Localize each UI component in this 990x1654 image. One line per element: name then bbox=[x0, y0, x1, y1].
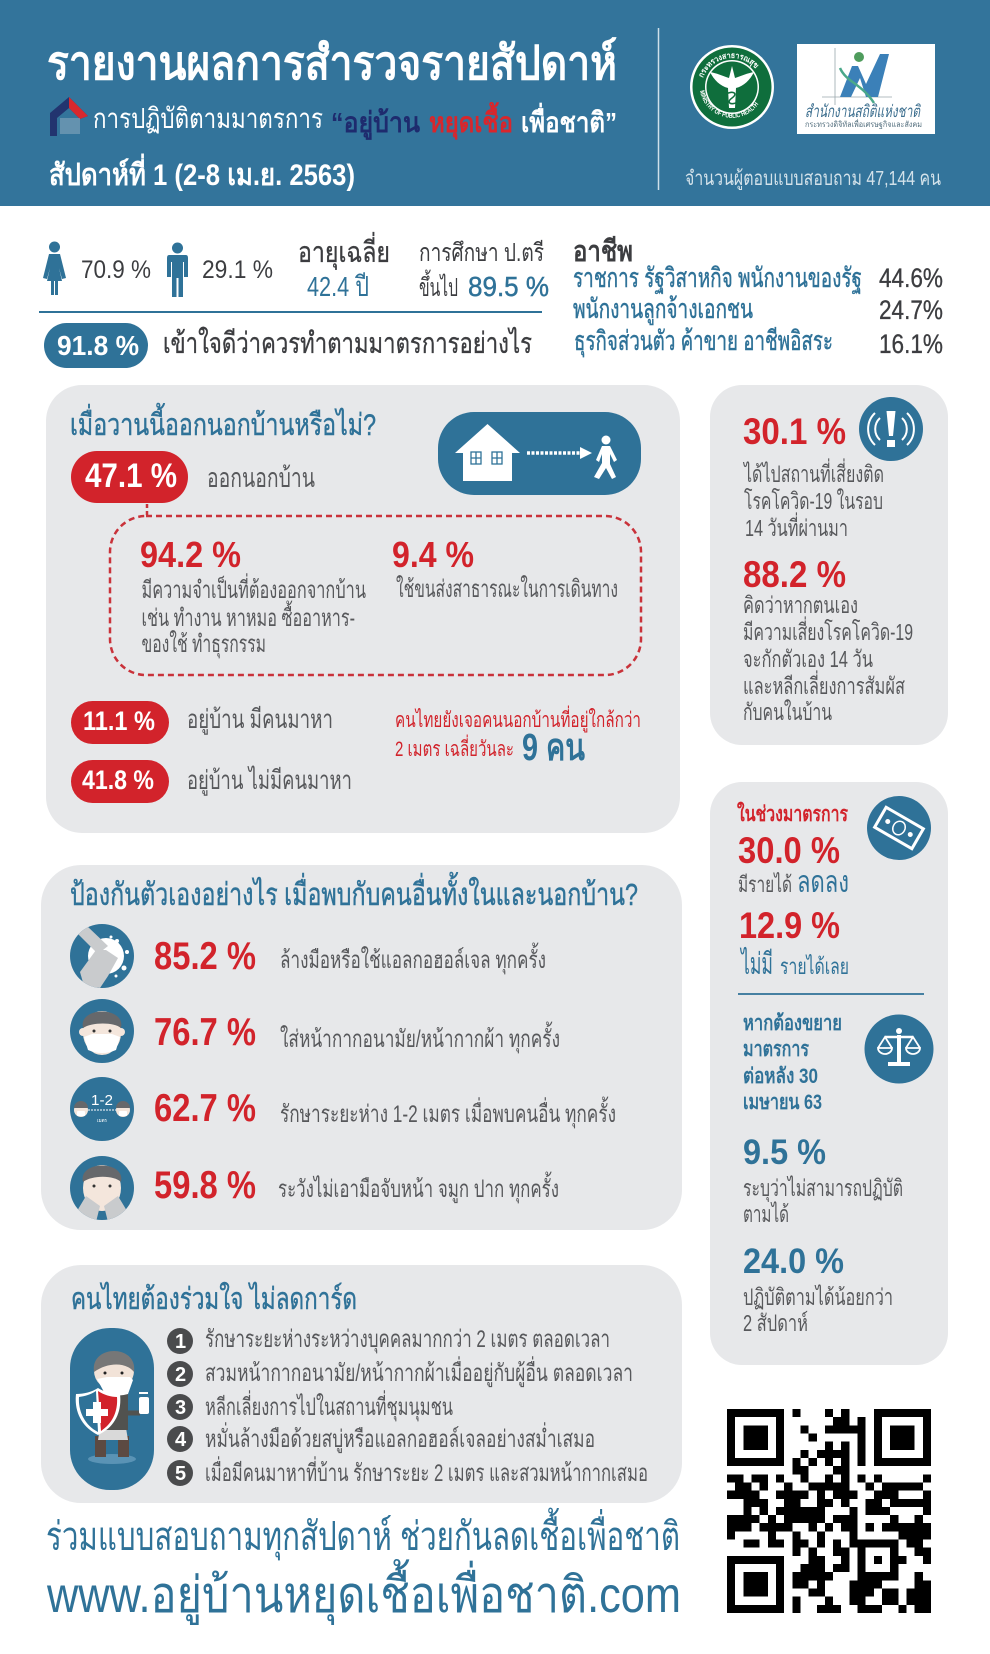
rule 5 bbox=[167, 1456, 648, 1487]
panel: demographics bbox=[39, 232, 943, 368]
close contact note: 9 คน bbox=[522, 727, 585, 769]
row: hand washing bbox=[154, 935, 546, 978]
dashed callout: 9.4 % bbox=[392, 534, 474, 575]
row: hand washing: ล้างมือหรือใช้แอลกอฮอล์เจล ทุกครั้ง bbox=[280, 942, 546, 975]
income stats: 30.0 % bbox=[738, 830, 840, 871]
extension heading: มาตรการ bbox=[743, 1038, 810, 1061]
occupation: ธุรกิจส่วนตัว ค้าขาย อาชีพอิสระ bbox=[574, 326, 833, 358]
row: hands off face: 59.8 % bbox=[154, 1164, 256, 1207]
extension heading bbox=[743, 1011, 842, 1114]
extension stat one bbox=[743, 1133, 903, 1227]
rule 3 bbox=[167, 1390, 453, 1422]
income stats bbox=[737, 801, 849, 981]
footer call to action: ร่วมแบบสอบถามทุกสัปดาห์ ช่วยกันลดเชื้อเพื่อชาติ bbox=[46, 1507, 680, 1561]
extension heading: เมษายน 63 bbox=[743, 1091, 822, 1114]
dashed callout: 94.2 % bbox=[140, 534, 241, 575]
dashed callout: ของใช้ ทำธุรกรรม bbox=[142, 630, 266, 659]
rule 1: รักษาระยะห่างระหว่างบุคคลมากกว่า 2 เมตร ตลอดเวลา bbox=[205, 1326, 610, 1354]
income stats: ไม่มี bbox=[740, 946, 773, 981]
logo: ministry of public health: กระทรวงสาธารณสุข bbox=[699, 53, 759, 78]
rule 4 bbox=[167, 1422, 595, 1454]
panel: income and extension bbox=[710, 782, 948, 1365]
dashed callout: ใช้ขนส่งสาธารณะในการเดินทาง bbox=[396, 575, 618, 603]
label: at home no visitors: อยู่บ้าน ไม่มีคนมาหา bbox=[187, 765, 352, 796]
close contact note: คนไทยยังเจอคนนอกบ้านที่อยู่ใกล้กว่า bbox=[395, 705, 641, 733]
rule 3: 3 bbox=[175, 1397, 186, 1419]
occupation: 44.6% bbox=[879, 263, 943, 293]
extension heading: หากต้องขยาย bbox=[743, 1011, 842, 1035]
income stats: ในช่วงมาตรการ bbox=[737, 801, 849, 826]
row: distance: 62.7 % bbox=[154, 1087, 256, 1130]
row: face mask bbox=[154, 1011, 560, 1054]
logo: national statistical office: กระทรวงดิจิทัลเพื่อเศรษฐกิจและสังคม bbox=[805, 118, 922, 129]
row: hand washing: 85.2 % bbox=[154, 935, 256, 978]
pill: went out: 47.1 % bbox=[85, 457, 177, 495]
subtitle: การปฏิบัติตามมาตรการ bbox=[93, 103, 323, 134]
dashed callout: เช่น ทำงาน หาหมอ ซื้ออาหาร- bbox=[142, 600, 355, 632]
income stats: มีรายได้ bbox=[738, 872, 792, 897]
rule 2 bbox=[167, 1356, 633, 1388]
logo: national statistical office bbox=[797, 44, 935, 134]
average age bbox=[298, 232, 390, 302]
pill: went out bbox=[71, 451, 188, 503]
income stats: ลดลง bbox=[797, 866, 849, 899]
row: face mask: ใส่หน้ากากอนามัย/หน้ากากผ้า ทุกครั้ง bbox=[280, 1021, 560, 1054]
occupation: 16.1% bbox=[879, 329, 943, 359]
understanding pill: 91.8 % bbox=[57, 330, 139, 361]
panel: went out yesterday bbox=[46, 385, 680, 833]
risk stat two bbox=[743, 554, 913, 725]
subtitle: หยุดเชื้อ bbox=[429, 101, 513, 140]
occupation: อาชีพ bbox=[573, 236, 633, 268]
education bbox=[419, 239, 549, 302]
subtitle bbox=[93, 101, 617, 140]
rule 3: หลีกเลี่ยงการไปในสถานที่ชุมนุมชน bbox=[205, 1390, 453, 1422]
rule 2: 2 bbox=[175, 1364, 186, 1386]
row: hands off face: ระวังไม่เอามือจับหน้า จมูก ปาก ทุกครั้ง bbox=[278, 1171, 559, 1204]
education: การศึกษา ป.ตรี bbox=[419, 239, 544, 267]
risk stat one: 14 วันที่ผ่านมา bbox=[745, 512, 848, 541]
footer url: www.อยู่บ้านหยุดเชื้อเพื่อชาติ.com bbox=[46, 1559, 681, 1625]
average age: 42.4 ปี bbox=[307, 271, 369, 302]
icon: alert bbox=[859, 397, 923, 461]
dashed callout bbox=[110, 516, 641, 675]
risk stat one: โรคโควิด-19 ในรอบ bbox=[744, 488, 883, 514]
icon: hand washing bbox=[70, 924, 134, 988]
icon: leaving house bbox=[438, 412, 641, 495]
icon: male bbox=[167, 242, 188, 297]
heading: เมื่อวานนี้ออกนอกบ้านหรือไม่? bbox=[70, 403, 376, 442]
extension stat one: ตามได้ bbox=[743, 1201, 789, 1227]
risk stat one bbox=[743, 411, 884, 541]
extension stat two bbox=[743, 1242, 893, 1336]
icon: person with shield bbox=[70, 1328, 154, 1490]
rule 1: 1 bbox=[175, 1331, 186, 1353]
row: distance: รักษาระยะห่าง 1-2 เมตร เมื่อพบคนอื่น ทุกครั้ง bbox=[280, 1096, 616, 1129]
average age: อายุเฉลี่ย bbox=[298, 232, 390, 270]
title: รายงานผลการสำรวจรายสัปดาห์ bbox=[47, 36, 617, 89]
panel: risk bbox=[710, 385, 948, 745]
extension heading: ต่อหลัง 30 bbox=[743, 1065, 818, 1088]
male share: 29.1 % bbox=[202, 256, 273, 284]
label: went out: ออกนอกบ้าน bbox=[207, 463, 315, 493]
occupation: พนักงานลูกจ้างเอกชน bbox=[573, 294, 753, 325]
close contact note bbox=[395, 705, 641, 769]
extension stat two: 24.0 % bbox=[743, 1242, 844, 1281]
income stats: รายได้เลย bbox=[780, 954, 849, 979]
row: distance bbox=[154, 1087, 616, 1130]
panel: self protection bbox=[41, 865, 682, 1230]
rule 5: 5 bbox=[175, 1463, 186, 1485]
understanding text: เข้าใจดีว่าควรทำตามมาตรการอย่างไร bbox=[163, 326, 532, 360]
pill: at home no visitors: 41.8 % bbox=[82, 765, 154, 795]
icon: distance: 1-2 bbox=[91, 1092, 113, 1109]
row: hands off face bbox=[154, 1164, 559, 1207]
week label: สัปดาห์ที่ 1 (2-8 เม.ย. 2563) bbox=[49, 153, 355, 192]
extension stat one: 9.5 % bbox=[743, 1133, 826, 1172]
rule 5: เมื่อมีคนมาหาที่บ้าน รักษาระยะ 2 เมตร และสวมหน้ากากเสมอ bbox=[205, 1456, 648, 1487]
icon: face mask bbox=[70, 999, 134, 1063]
icon: distance: เมตร bbox=[97, 1118, 107, 1124]
heading: ป้องกันตัวเองอย่างไร เมื่อพบกับคนอื่นทั้งในและนอกบ้าน? bbox=[70, 872, 638, 912]
risk stat one: 30.1 % bbox=[743, 411, 846, 452]
dashed callout: มีความจำเป็นที่ต้องออกจากบ้าน bbox=[142, 573, 366, 604]
pill: at home no visitors bbox=[71, 760, 169, 803]
icon: distance bbox=[70, 1077, 134, 1141]
extension stat two: 2 สัปดาห์ bbox=[743, 1310, 808, 1336]
female share: 70.9 % bbox=[81, 256, 151, 284]
rule 4: หมั่นล้างมือด้วยสบู่หรือแอลกอฮอล์เจลอย่างสม่ำเสมอ bbox=[205, 1422, 595, 1454]
understanding pill bbox=[44, 323, 148, 368]
panel: thais unite bbox=[41, 1265, 682, 1503]
risk stat two: จะกักตัวเอง 14 วัน bbox=[743, 646, 873, 672]
education: 89.5 % bbox=[468, 271, 549, 302]
logo: national statistical office: สำนักงานสถิติแห่งชาติ bbox=[805, 102, 921, 121]
rule 2: สวมหน้ากากอนามัย/หน้ากากผ้าเมื่ออยู่กับผู้อื่น ตลอดเวลา bbox=[205, 1356, 633, 1388]
row: face mask: 76.7 % bbox=[154, 1011, 256, 1054]
label: at home with visitors: อยู่บ้าน มีคนมาหา bbox=[187, 704, 333, 735]
rule 1 bbox=[167, 1326, 610, 1354]
subtitle: “อยู่บ้าน bbox=[331, 107, 420, 140]
close contact note: 2 เมตร เฉลี่ยวันละ bbox=[395, 734, 514, 761]
income stats: 12.9 % bbox=[739, 905, 840, 946]
education: ขึ้นไป bbox=[419, 269, 458, 302]
risk stat one: ได้ไปสถานที่เสี่ยงติด bbox=[743, 458, 884, 487]
extension stat two: ปฏิบัติตามได้น้อยกว่า bbox=[743, 1284, 893, 1310]
occupation: ราชการ รัฐวิสาหกิจ พนักงานของรัฐ bbox=[573, 263, 862, 294]
risk stat two: กับคนในบ้าน bbox=[743, 699, 832, 725]
qr code bbox=[727, 1413, 931, 1609]
risk stat two: 88.2 % bbox=[743, 554, 846, 595]
icon: female bbox=[43, 242, 66, 295]
icon: hands off face bbox=[70, 1156, 134, 1222]
rule 4: 4 bbox=[175, 1429, 187, 1451]
logo: ministry of public health bbox=[690, 45, 774, 129]
occupation: 24.7% bbox=[879, 295, 943, 325]
icon: money bbox=[867, 796, 931, 860]
heading: คนไทยต้องร่วมใจ ไม่ลดการ์ด bbox=[71, 1281, 357, 1316]
extension stat one: ระบุว่าไม่สามารถปฏิบัติ bbox=[743, 1175, 903, 1202]
subtitle: เพื่อชาติ” bbox=[521, 102, 617, 138]
risk stat two: มีความเสี่ยงโรคโควิด-19 bbox=[743, 616, 913, 645]
icon: house logo bbox=[50, 97, 88, 136]
pill: at home with visitors bbox=[71, 701, 169, 744]
occupation bbox=[573, 236, 943, 359]
header band bbox=[0, 0, 990, 206]
risk stat two: คิดว่าหากตนเอง bbox=[743, 592, 858, 618]
logo: ministry of public health: MINISTRY OF PUBLIC HEALTH bbox=[700, 90, 758, 118]
risk stat two: และหลีกเลี่ยงการสัมผัส bbox=[743, 670, 905, 699]
pill: at home with visitors: 11.1 % bbox=[83, 706, 155, 736]
icon: scales bbox=[864, 1014, 934, 1084]
